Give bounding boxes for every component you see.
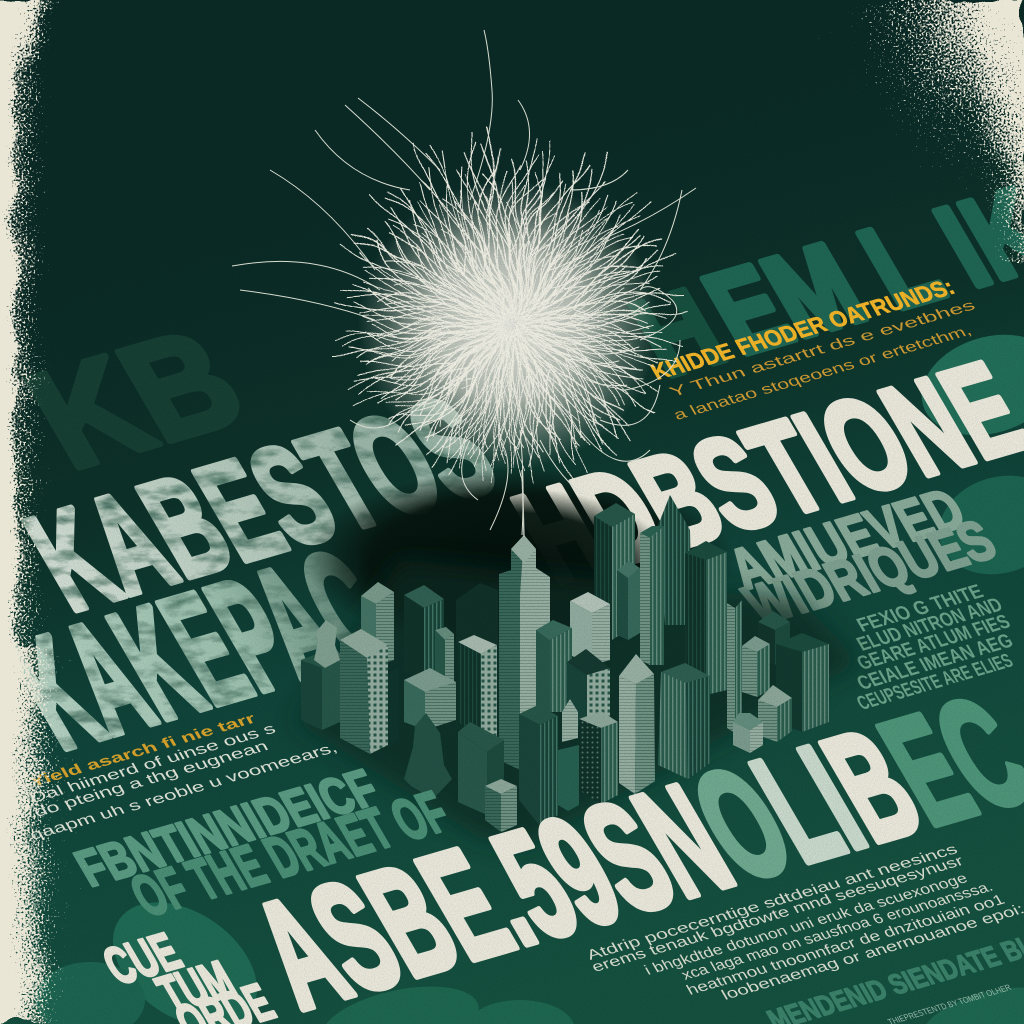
body paragraph: i bhgkdtde dotunon uni eruk da scuexonoge [641,870,971,978]
body paragraph: heatnmou tnoonnfacr de dnzitouiain oo1 [683,892,1008,998]
subheading: FBNTINNIDEICF OF THE DRAET OF: OF THE DRAET OF [119,780,461,929]
city ground shadow [296,560,860,846]
callout: hidden dangers: KHIDDE FHODER OATRUNDS: [646,275,960,385]
stacked label: CUE TUM ORDE: TUM [146,949,245,1023]
body paragraph: loobenaemag or anernouanoe epoi: [718,901,1024,1003]
poster: KAKEPAC [0,519,418,781]
body paragraph: Atdrip pocecerntige sdtdeiau ant neesincs [583,841,961,963]
callout: hidden dangers: a lanatao stoqeoens or ertetcthm, [670,323,975,423]
icon: monument [404,713,452,799]
icon: landmark spire tower [499,470,550,770]
subheading: FBNTINNIDEICF OF THE DRAET OF [65,758,461,929]
small green text block: FEXIO G THITE [853,581,987,636]
small green text block [853,581,1017,714]
dark pit beneath fibres [305,468,735,652]
subheading: FBNTINNIDEICF OF THE DRAET OF: FBNTINNIDEICF [65,758,389,897]
yellow left heading and body text [26,710,340,843]
stacked label: CUE TUM ORDE: CUE [92,921,191,995]
yellow left heading and body text: do pteing a thg eugnean [30,738,271,820]
yellow left heading and body text: Yield asarch fi nie tarr [26,710,259,790]
icon: pale obelisk building [619,654,655,794]
callout: hidden dangers: Y Thun astartrt ds e evetbhes [666,297,978,400]
background letterforms: H [611,266,745,400]
callout: hidden dangers [646,275,978,423]
isometric city [301,470,829,832]
yellow left heading and body text: Dal hiimerd of uinse ous s [26,721,279,806]
yellow left heading and body text: qaapm uh s reoble u voomeears, [26,740,340,843]
headline: KABESTOS: KABESTOS [2,369,520,640]
pit overlay hiding letter feet [355,488,675,652]
loose wisps [232,30,696,535]
icon: statue on building [301,620,340,730]
body paragraph [583,841,1024,1003]
body paragraph: erems tenauk bgdtowte mnd seesuqesynusr [588,853,967,975]
background letterforms: KB [2,300,268,498]
asbestos fibre cluster [232,30,696,535]
stacked label: CUE TUM ORDE [92,921,284,1024]
body paragraph: xca laga mao on sausfnoa 6 erounoansssa. [678,879,996,983]
